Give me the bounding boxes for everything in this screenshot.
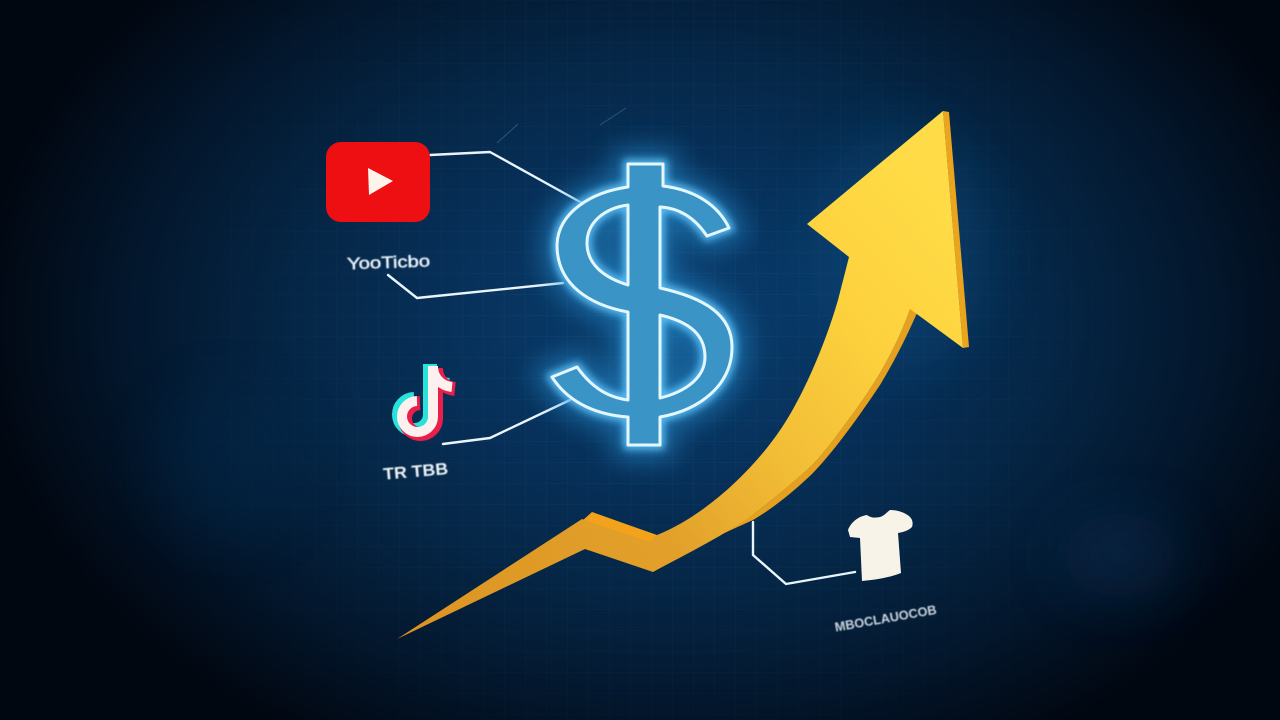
icon: neon dollar sign [552, 164, 732, 445]
label: TikTok: TR TBB [382, 459, 449, 484]
connector: YouTube icon to dollar [430, 152, 582, 203]
icon: YouTube [326, 142, 430, 222]
label: merchandise: MBOCLAUOCOB [834, 602, 938, 635]
connector: merchandise to arrow [753, 522, 855, 584]
icon: T-shirt [848, 510, 913, 581]
label: YouTube: YooTicbo [347, 252, 430, 273]
arrow: front face [397, 111, 963, 639]
connector: YouTube label to dollar [388, 275, 563, 298]
arrow: side faces [582, 111, 969, 543]
connector: TikTok to dollar [443, 400, 570, 444]
icon: TikTok note [399, 364, 455, 434]
growth arrow [397, 111, 969, 639]
connector lines [388, 152, 855, 584]
